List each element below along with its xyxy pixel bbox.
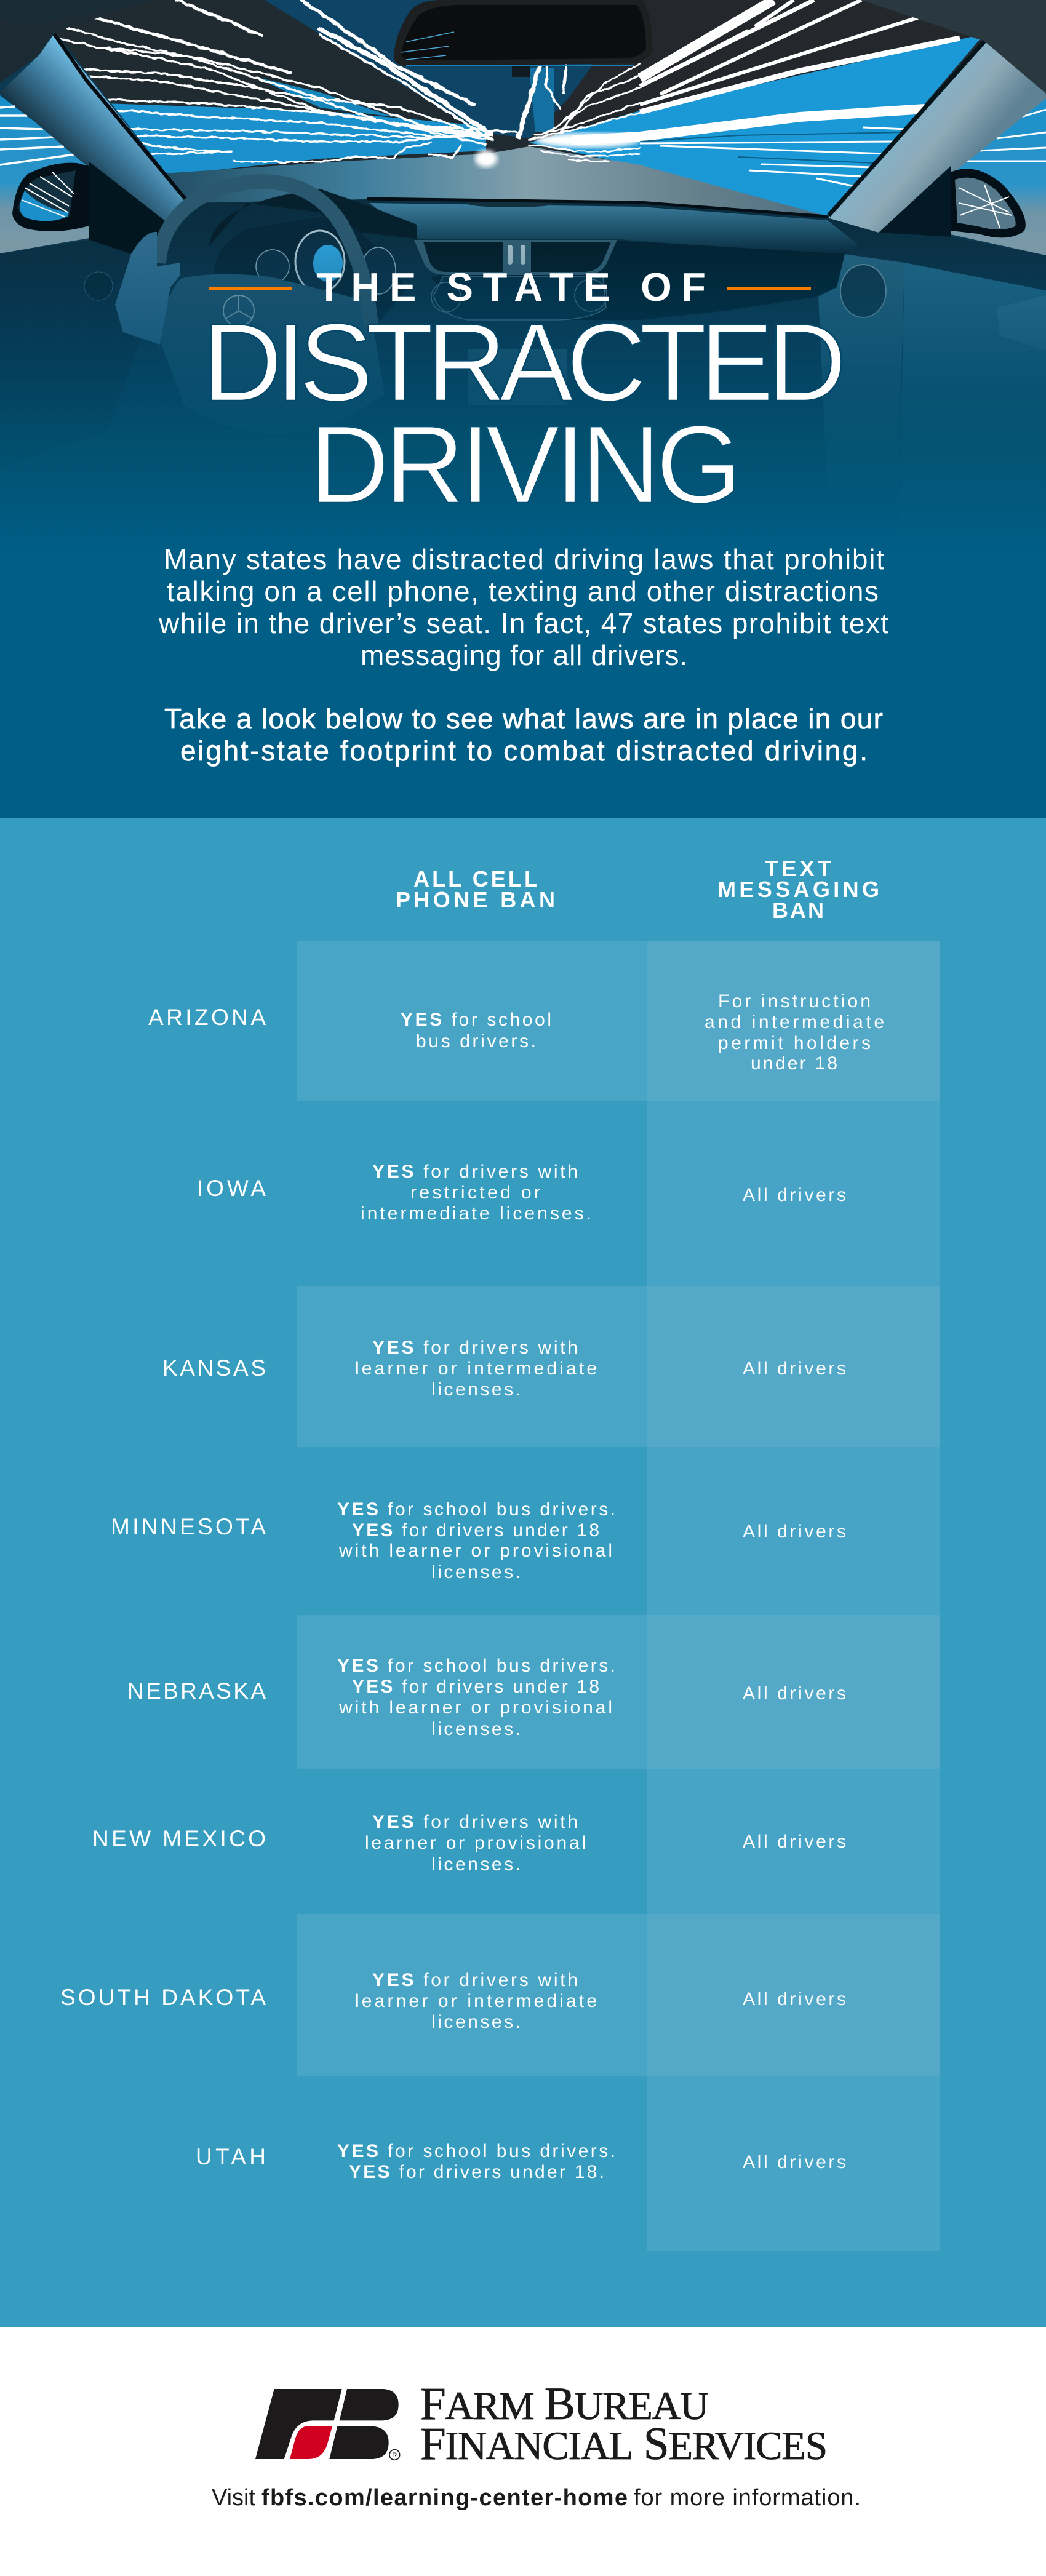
left light streaks [60, 0, 640, 162]
right bright blue wall [529, 34, 984, 217]
row: Arizona: ARIZONA [148, 1005, 266, 1030]
left pillar seal [54, 34, 188, 202]
row: South Dakota: SOUTH DAKOTA [60, 1985, 266, 2010]
row: Arizona: and intermediate [705, 1012, 884, 1032]
left A pillar [0, 34, 188, 229]
column heading: text messaging ban: TEXT [765, 856, 831, 881]
footer call to action: Visit [212, 2485, 255, 2511]
row: Kansas: licenses. [431, 1379, 521, 1400]
row: Kansas: All drivers [743, 1358, 846, 1379]
panel: state law table [0, 818, 1046, 2327]
row: Minnesota: with learner or provisional [338, 1541, 612, 1561]
logo wordmark: FARM BUREAU [420, 2379, 709, 2430]
left mirror [12, 163, 89, 231]
title: the state of: THE STATE OF [317, 265, 706, 309]
row: Iowa [197, 1162, 846, 1224]
dark area below left pillar [89, 162, 175, 258]
panel: footer [0, 2327, 1046, 2576]
row: New Mexico: All drivers [743, 1832, 846, 1852]
column heading: text messaging ban [717, 856, 879, 923]
air vents [414, 240, 617, 275]
intro paragraph: messaging for all drivers. [361, 639, 687, 671]
right dash panel [818, 254, 904, 492]
door handle [997, 295, 1046, 351]
row: Arizona: YES for school [401, 1010, 551, 1030]
row: Minnesota [111, 1499, 846, 1582]
right side window [948, 98, 1046, 255]
mirror mount [512, 66, 530, 77]
logo mark: FB: R [392, 2452, 397, 2459]
title: the state of [209, 265, 811, 309]
row: Nebraska: YES for drivers under 18 [352, 1677, 599, 1697]
windshield base seal [367, 199, 828, 217]
row: Kansas [162, 1338, 846, 1400]
row: Minnesota: YES for school bus drivers. [337, 1499, 615, 1520]
windshield scene [60, 0, 984, 217]
title: distracted driving: DISTRACTED [202, 301, 847, 425]
row: Arizona: under 18 [751, 1053, 837, 1074]
hood over cluster [209, 189, 417, 246]
right light streaks [572, 0, 960, 186]
mirror underside glow [406, 65, 634, 66]
row: Utah [196, 2141, 846, 2182]
glove box dark recess [431, 241, 845, 320]
row: Nebraska: All drivers [743, 1683, 846, 1704]
row: Utah: YES for drivers under 18. [349, 2162, 604, 2182]
vanishing point glow [535, 133, 640, 148]
upper blue patch [255, 77, 394, 117]
hero fade overlay [0, 0, 1046, 818]
table cell backgrounds [297, 941, 940, 2251]
row: Iowa: restricted or [410, 1182, 540, 1203]
column heading: all cell phone ban: ALL CELL [413, 866, 538, 891]
right round vent [840, 265, 886, 317]
right A pillar [829, 41, 1046, 233]
intro paragraph: Many states have distracted driving laws that prohibit [164, 543, 884, 575]
row: New Mexico [92, 1812, 846, 1875]
footer call to action [212, 2485, 861, 2511]
column heading: text messaging ban: BAN [772, 898, 824, 923]
row: South Dakota: All drivers [743, 1989, 846, 2009]
row: Iowa: IOWA [197, 1176, 266, 1201]
right door panel [898, 263, 1046, 554]
instrument cluster [214, 215, 406, 320]
left blue wall [105, 103, 486, 175]
row: Utah: All drivers [743, 2152, 846, 2172]
steering wheel rim [159, 181, 371, 326]
row: Arizona [148, 991, 884, 1074]
row: Minnesota: MINNESOTA [111, 1514, 266, 1539]
row: Nebraska: licenses. [431, 1719, 521, 1739]
road [163, 146, 829, 217]
intro paragraph [158, 543, 888, 671]
row: South Dakota: YES for drivers with [372, 1970, 578, 1990]
row: Kansas: KANSAS [162, 1355, 266, 1381]
intro paragraph: while in the driver’s seat. In fact, 47 states prohibit text [158, 607, 888, 639]
windshield glass [54, 0, 984, 215]
column heading: all cell phone ban: PHONE BAN [396, 887, 555, 912]
row: New Mexico: licenses. [431, 1854, 521, 1875]
headlight glow [475, 150, 497, 167]
title: distracted driving [202, 301, 847, 527]
centre console screen [468, 349, 567, 405]
right roof corner [861, 0, 1046, 94]
row: South Dakota: learner or intermediate [355, 1991, 597, 2011]
row: New Mexico: YES for drivers with [372, 1812, 578, 1832]
dash top strip [369, 203, 858, 255]
row: Minnesota: licenses. [431, 1562, 521, 1582]
hero photo: car interior view through windshield [0, 0, 1046, 422]
row: Utah: UTAH [196, 2144, 266, 2169]
logo wordmark: FINANCIAL SERVICES [420, 2418, 828, 2470]
row: New Mexico: NEW MEXICO [92, 1826, 266, 1851]
defrost vent [468, 200, 554, 207]
call to action paragraph: eight-state footprint to combat distracted driving. [180, 735, 868, 767]
footer call to action: fbfs.com/learning-center-home [262, 2485, 628, 2511]
row: Arizona: bus drivers. [416, 1031, 536, 1051]
row: Iowa: intermediate licenses. [361, 1203, 591, 1224]
row: Nebraska: with learner or provisional [338, 1697, 612, 1718]
right mirror [951, 169, 1026, 237]
left dash knob [84, 272, 113, 300]
intro paragraph: talking on a cell phone, texting and other distractions [167, 575, 879, 607]
far-right blue tunnel patch [529, 68, 554, 132]
column heading: all cell phone ban [396, 866, 555, 912]
steering wheel hub [161, 274, 385, 434]
call to action paragraph: Take a look below to see what laws are in place in our [164, 703, 883, 735]
row: Nebraska [127, 1656, 846, 1739]
dashboard [0, 199, 1046, 615]
left roof and visor [0, 0, 156, 23]
row: Nebraska: YES for school bus drivers. [337, 1656, 615, 1676]
row: Kansas: YES for drivers with [372, 1338, 578, 1358]
mercedes badge [223, 295, 254, 326]
column heading: text messaging ban: MESSAGING [717, 877, 879, 902]
row: New Mexico: learner or provisional [365, 1833, 586, 1853]
left side window [0, 95, 89, 253]
left upper trim [0, 0, 154, 83]
row: Iowa: All drivers [743, 1185, 846, 1205]
title: distracted driving: DRIVING [309, 403, 742, 527]
row: Kansas: learner or intermediate [355, 1358, 597, 1379]
climate panel [431, 277, 607, 320]
row: South Dakota: licenses. [431, 2012, 521, 2032]
dark centre behind mirror [265, 0, 593, 138]
call to action paragraph [164, 703, 883, 767]
logo mark: FB [255, 2389, 400, 2460]
row: Minnesota: All drivers [743, 1521, 846, 1542]
panel: hero header [0, 0, 1046, 818]
left dash panel [0, 241, 148, 468]
row: Utah: YES for school bus drivers. [337, 2141, 615, 2161]
hand on wheel [115, 232, 180, 345]
row: Arizona: permit holders [718, 1033, 871, 1053]
row: Nebraska: NEBRASKA [127, 1678, 266, 1704]
logo wordmark [420, 2379, 828, 2470]
row: Arizona: For instruction [718, 991, 871, 1011]
rearview mirror [394, 0, 652, 66]
row: South Dakota [60, 1970, 846, 2032]
dark area below right pillar [879, 166, 951, 240]
right upper wall [569, 0, 665, 98]
row: Minnesota: YES for drivers under 18 [352, 1520, 599, 1541]
row: Iowa: YES for drivers with [372, 1162, 578, 1182]
footer call to action: for more information. [634, 2485, 861, 2511]
right pillar seal [829, 41, 984, 215]
